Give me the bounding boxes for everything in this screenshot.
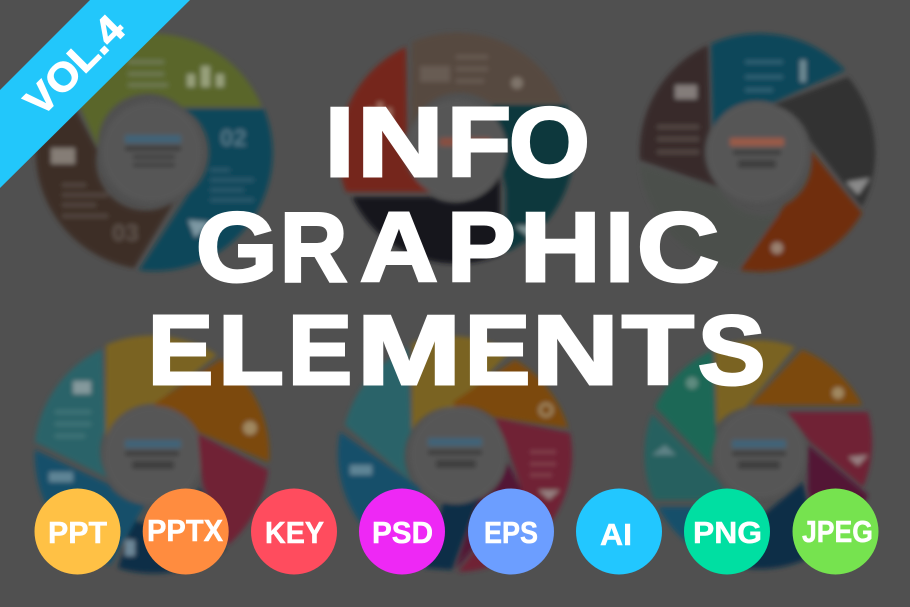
format badge: PPT: PPT <box>48 515 107 550</box>
donut chart: bottom right <box>645 340 872 569</box>
format badge: JPEG: JPEG <box>802 514 873 549</box>
donut chart: bottom middle <box>338 336 572 572</box>
format badge: EPS <box>468 488 554 574</box>
title: INFO GRAPHIC ELEMENTS: E <box>288 294 352 404</box>
donut chart: top left <box>36 34 273 271</box>
format badge: EPS: EPS <box>484 515 538 550</box>
format badge: KEY <box>251 488 337 574</box>
format badge: JPEG <box>792 488 878 574</box>
title: INFO GRAPHIC ELEMENTS: N <box>357 86 444 196</box>
format badge: PNG <box>684 488 770 574</box>
format badge: PNG: PNG <box>693 515 762 550</box>
donut chart: bottom left <box>35 336 269 573</box>
format badge: PPT <box>34 488 120 574</box>
title: INFO GRAPHIC ELEMENTS: H <box>520 192 601 302</box>
ribbon: VOL.4: VOL.4 <box>16 6 134 124</box>
title: INFO GRAPHIC ELEMENTS: G <box>196 192 277 302</box>
title: INFO GRAPHIC ELEMENTS: T <box>622 294 694 404</box>
title: INFO GRAPHIC ELEMENTS: E <box>465 294 530 404</box>
ribbon: VOL.4 <box>0 0 190 188</box>
title: INFO GRAPHIC ELEMENTS: C <box>636 192 719 302</box>
format badge: PSD <box>359 488 445 574</box>
title: INFO GRAPHIC ELEMENTS: E <box>148 294 213 404</box>
donut chart: top left: 03 <box>112 220 139 247</box>
title: INFO GRAPHIC ELEMENTS: I <box>604 192 634 302</box>
format badge: AI: AI <box>600 517 632 552</box>
title: INFO GRAPHIC ELEMENTS: R <box>280 192 347 302</box>
donut chart: top middle <box>339 33 574 264</box>
format badge: PPTX: PPTX <box>147 513 223 548</box>
format badge: KEY: KEY <box>265 515 324 550</box>
title: INFO GRAPHIC ELEMENTS: S <box>698 294 765 404</box>
format badge: AI <box>576 488 662 574</box>
title: INFO GRAPHIC ELEMENTS: I <box>324 86 354 196</box>
title: INFO GRAPHIC ELEMENTS: A <box>360 192 437 302</box>
title: INFO GRAPHIC ELEMENTS <box>148 86 765 404</box>
title: INFO GRAPHIC ELEMENTS: F <box>447 86 511 196</box>
donut chart: top left: 02 <box>220 125 247 152</box>
donut chart: top right <box>640 33 875 272</box>
title: INFO GRAPHIC ELEMENTS: O <box>509 86 590 196</box>
format badge: PSD: PSD <box>372 515 433 550</box>
title: INFO GRAPHIC ELEMENTS: M <box>356 294 461 404</box>
format badge: PPTX <box>143 488 229 574</box>
title: INFO GRAPHIC ELEMENTS: N <box>532 294 619 404</box>
title: INFO GRAPHIC ELEMENTS: P <box>447 192 515 302</box>
title: INFO GRAPHIC ELEMENTS: L <box>218 294 284 404</box>
